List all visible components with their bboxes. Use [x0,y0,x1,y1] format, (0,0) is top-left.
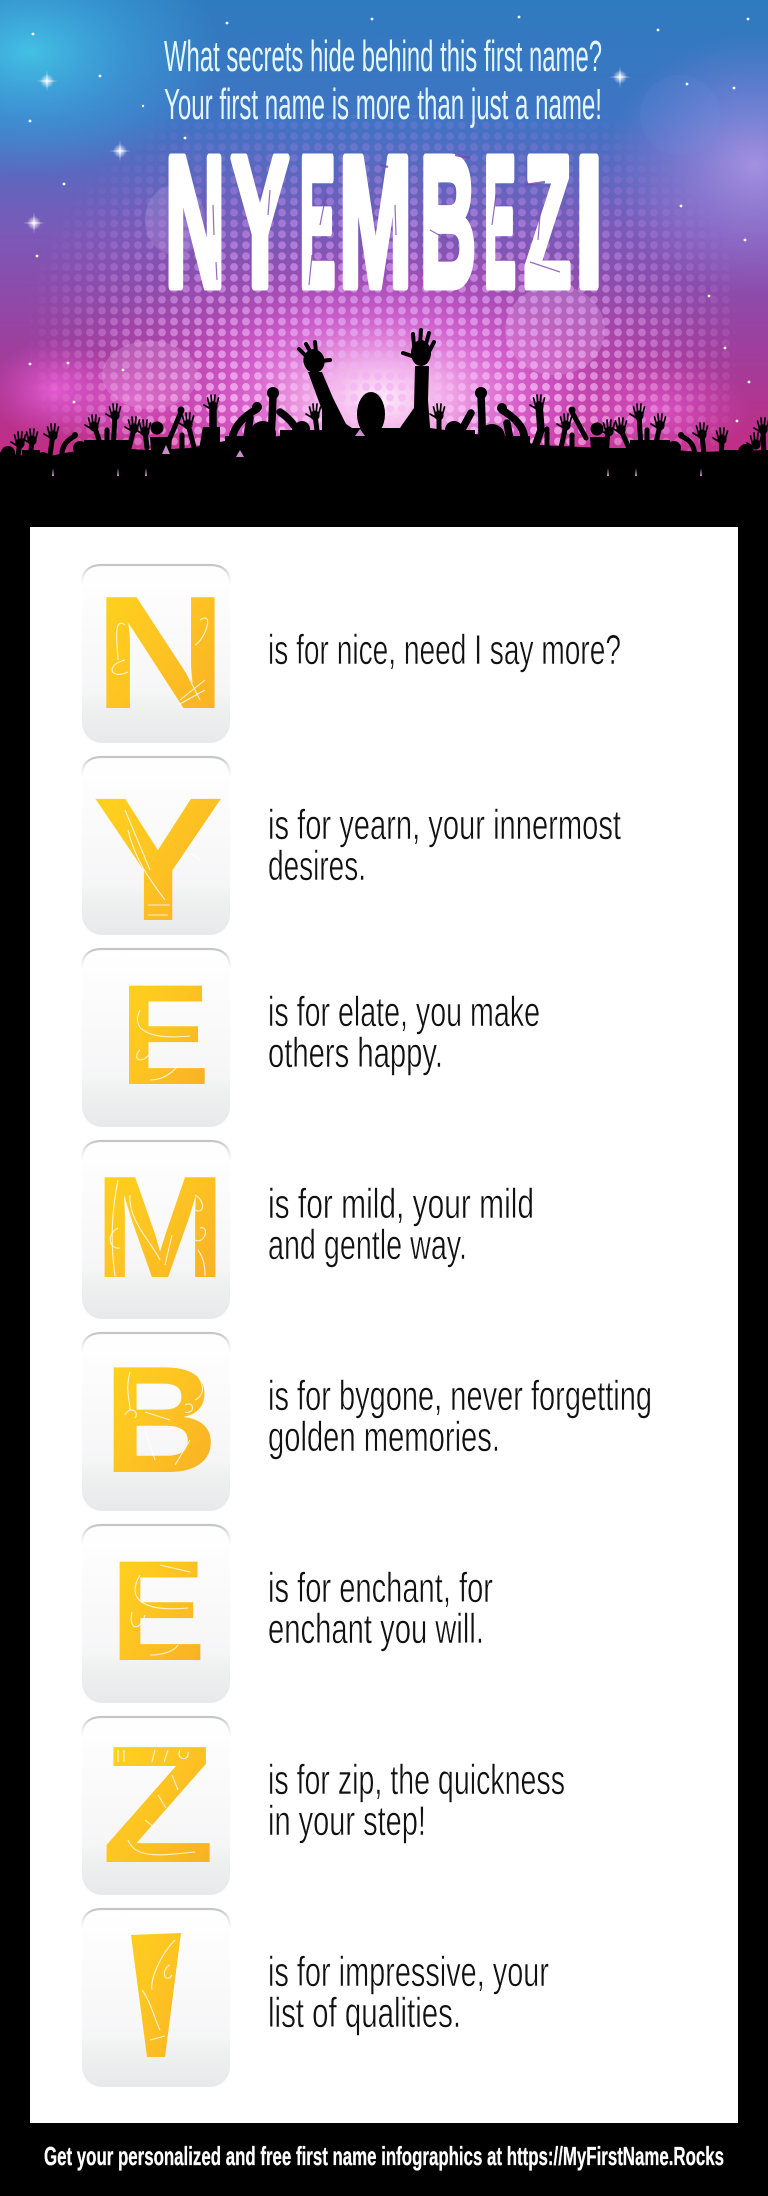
letter B: B [103,1335,218,1505]
row I [82,1908,548,2087]
heading: first name: N [165,119,225,326]
heading: first name: I [575,119,603,326]
row M [82,1140,534,1319]
crowd silhouette [0,330,768,527]
heading: first name [165,119,603,326]
row I: list of qualities. [268,1989,461,2036]
letter N: N [94,563,227,743]
row E [82,948,540,1127]
row Y: desires. [268,842,366,889]
row E second [82,1524,493,1703]
heading: tagline [164,32,602,129]
letter I: I [106,1894,206,2100]
row Z: in your step! [268,1797,426,1844]
text: Z lines: is for zip, the quickness [268,1756,565,1803]
name distress marks [213,155,560,285]
letter Z: Z [101,1712,215,1898]
text: M lines: is for mild, your mild [268,1180,534,1227]
text: Y lines: is for yearn, your innermost [268,801,621,848]
heading: first name: B [420,119,476,326]
text: E second lines: is for enchant, for [268,1564,493,1611]
text: I lines: is for impressive, your [268,1948,549,1995]
text: E lines: is for elate, you make [268,988,540,1035]
heading: first name: E [484,119,516,326]
sparkles [23,16,750,422]
heading: first name: Y [231,119,289,326]
panel: letter list [30,527,738,2123]
heading: first name: M [339,119,412,326]
row Z [82,1712,565,1898]
row N [82,563,621,743]
row E: others happy. [268,1029,443,1076]
heading: first name: E [300,119,336,326]
row B: golden memories. [268,1413,500,1460]
row Y [82,756,621,958]
heading: first name: Z [524,119,571,326]
letter M: M [94,1146,226,1308]
header: concert stage background [0,0,768,456]
letter Y: Y [92,762,224,958]
row B [82,1332,652,1511]
letter E: E [110,1532,206,1691]
row E second: enchant you will. [268,1605,484,1652]
row M: and gentle way. [268,1221,467,1268]
letter E: E [120,956,210,1115]
